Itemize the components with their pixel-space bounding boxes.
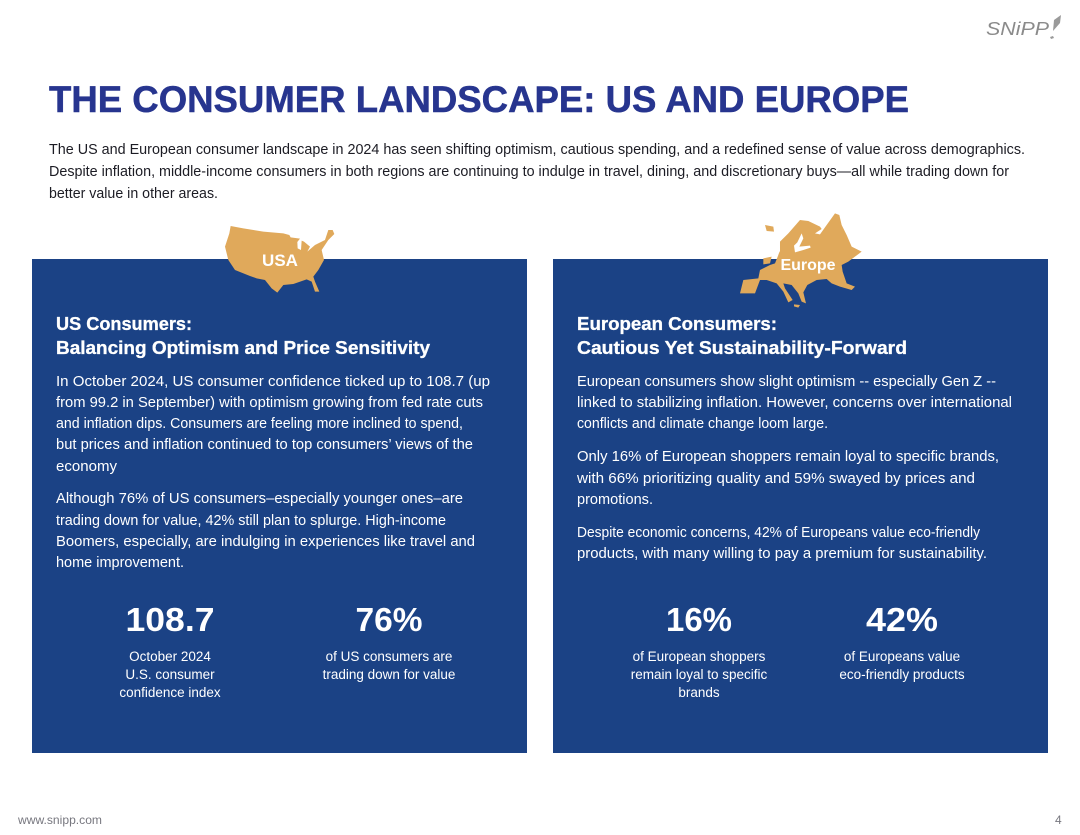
stat: 76%: 76%	[356, 601, 422, 638]
text block: US confidence: but prices and inflation continued to top consumers’ views of the	[56, 437, 473, 453]
stat: 76%	[323, 601, 455, 682]
icon: Europe map	[740, 213, 862, 308]
intro text: The US and European consumer landscape in 2024 has seen shifting optimism, cautious spending, and a redefined sense of value across demographics.	[49, 142, 1025, 158]
text block: Europe optimism: linked to stabilizing inflation. However, concerns over international	[577, 395, 1012, 411]
stat: 42%	[839, 601, 965, 682]
heading: Europe: Cautious Yet Sustainability-Forward	[577, 338, 907, 358]
logo: Snipp: SNiPP	[986, 19, 1049, 39]
text block: Europe loyalty: with 66% prioritizing quality and 59% swayed by prices and	[576, 471, 975, 487]
heading: Europe	[577, 314, 907, 358]
title: THE CONSUMER LANDSCAPE: US AND EUROPE	[49, 79, 909, 120]
text block: US trading down: Although 76% of US consumers–especially younger ones–are	[56, 491, 463, 507]
stat: 16%: 16%	[666, 601, 732, 638]
stat: 108.7: 108.7	[126, 601, 214, 638]
text block: US trading down	[56, 491, 475, 571]
text block: Europe eco-friendly	[577, 525, 987, 562]
stat: 16%	[631, 601, 768, 700]
stat: 42%: eco-friendly products	[839, 667, 965, 682]
stat: 42%: 42%	[866, 601, 938, 638]
logo: Snipp	[986, 15, 1061, 39]
footer: page number: 4	[1055, 813, 1062, 827]
panel: European consumers	[553, 213, 1048, 753]
text block: Europe optimism	[577, 374, 1012, 432]
intro text: better value in other areas.	[49, 186, 218, 202]
stat: 108.7: U.S. consumer	[125, 667, 215, 682]
stat: 16%: brands	[678, 685, 720, 700]
stat: 42%: of Europeans value	[844, 649, 960, 664]
text block: Europe eco-friendly: Despite economic concerns, 42% of Europeans value eco-friendly	[577, 525, 981, 541]
text block: US confidence: and inflation dips. Consumers are feeling more inclined to spend,	[56, 416, 463, 432]
intro text	[49, 142, 1025, 202]
text block: Europe eco-friendly: products, with many willing to pay a premium for sustainability.	[577, 546, 987, 562]
text block: US trading down: trading down for value, 42% still plan to splurge. High-income	[56, 513, 446, 529]
text block: Europe loyalty: Only 16% of European shoppers remain loyal to specific brands,	[577, 449, 999, 465]
text block: US confidence: from 99.2 in September) with optimism growing from fed rate cuts	[56, 395, 483, 411]
text block: US trading down: home improvement.	[56, 555, 184, 571]
icon: USA map: USA	[262, 251, 298, 270]
text block: US confidence	[56, 374, 490, 475]
stat: 108.7: October 2024	[129, 649, 211, 664]
heading: US: Balancing Optimism and Price Sensitivity	[56, 338, 430, 358]
text block: Europe loyalty: promotions.	[577, 492, 653, 508]
panel: US consumers	[32, 226, 527, 753]
intro text: Despite inflation, middle-income consumers in both regions are continuing to indulge in travel, dining, and discretionary buys—all while trading down for	[49, 164, 1009, 180]
heading: US	[56, 314, 430, 358]
text block: Europe optimism: European consumers show slight optimism -- especially Gen Z --	[577, 374, 996, 390]
text block: Europe optimism: conflicts and climate change loom large.	[577, 416, 828, 432]
text block: US confidence: economy	[56, 459, 118, 475]
stat: 108.7	[119, 601, 221, 700]
text block: Europe loyalty	[576, 449, 999, 508]
heading: US: US Consumers:	[56, 314, 192, 334]
text block: US confidence: In October 2024, US consumer confidence ticked up to 108.7 (up	[56, 374, 490, 390]
icon: USA map	[225, 226, 334, 293]
stat: 76%: of US consumers are	[326, 649, 452, 664]
stat: 108.7: confidence index	[119, 685, 221, 700]
stat: 16%: of European shoppers	[633, 649, 766, 664]
heading: Europe: European Consumers:	[577, 314, 777, 334]
icon: Europe map: Europe	[780, 257, 836, 274]
footer: website: www.snipp.com	[17, 813, 102, 827]
text block: US trading down: Boomers, especially, are indulging in experiences like travel and	[56, 534, 475, 550]
stat: 76%: trading down for value	[323, 667, 455, 682]
stat: 16%: remain loyal to specific	[631, 667, 768, 682]
